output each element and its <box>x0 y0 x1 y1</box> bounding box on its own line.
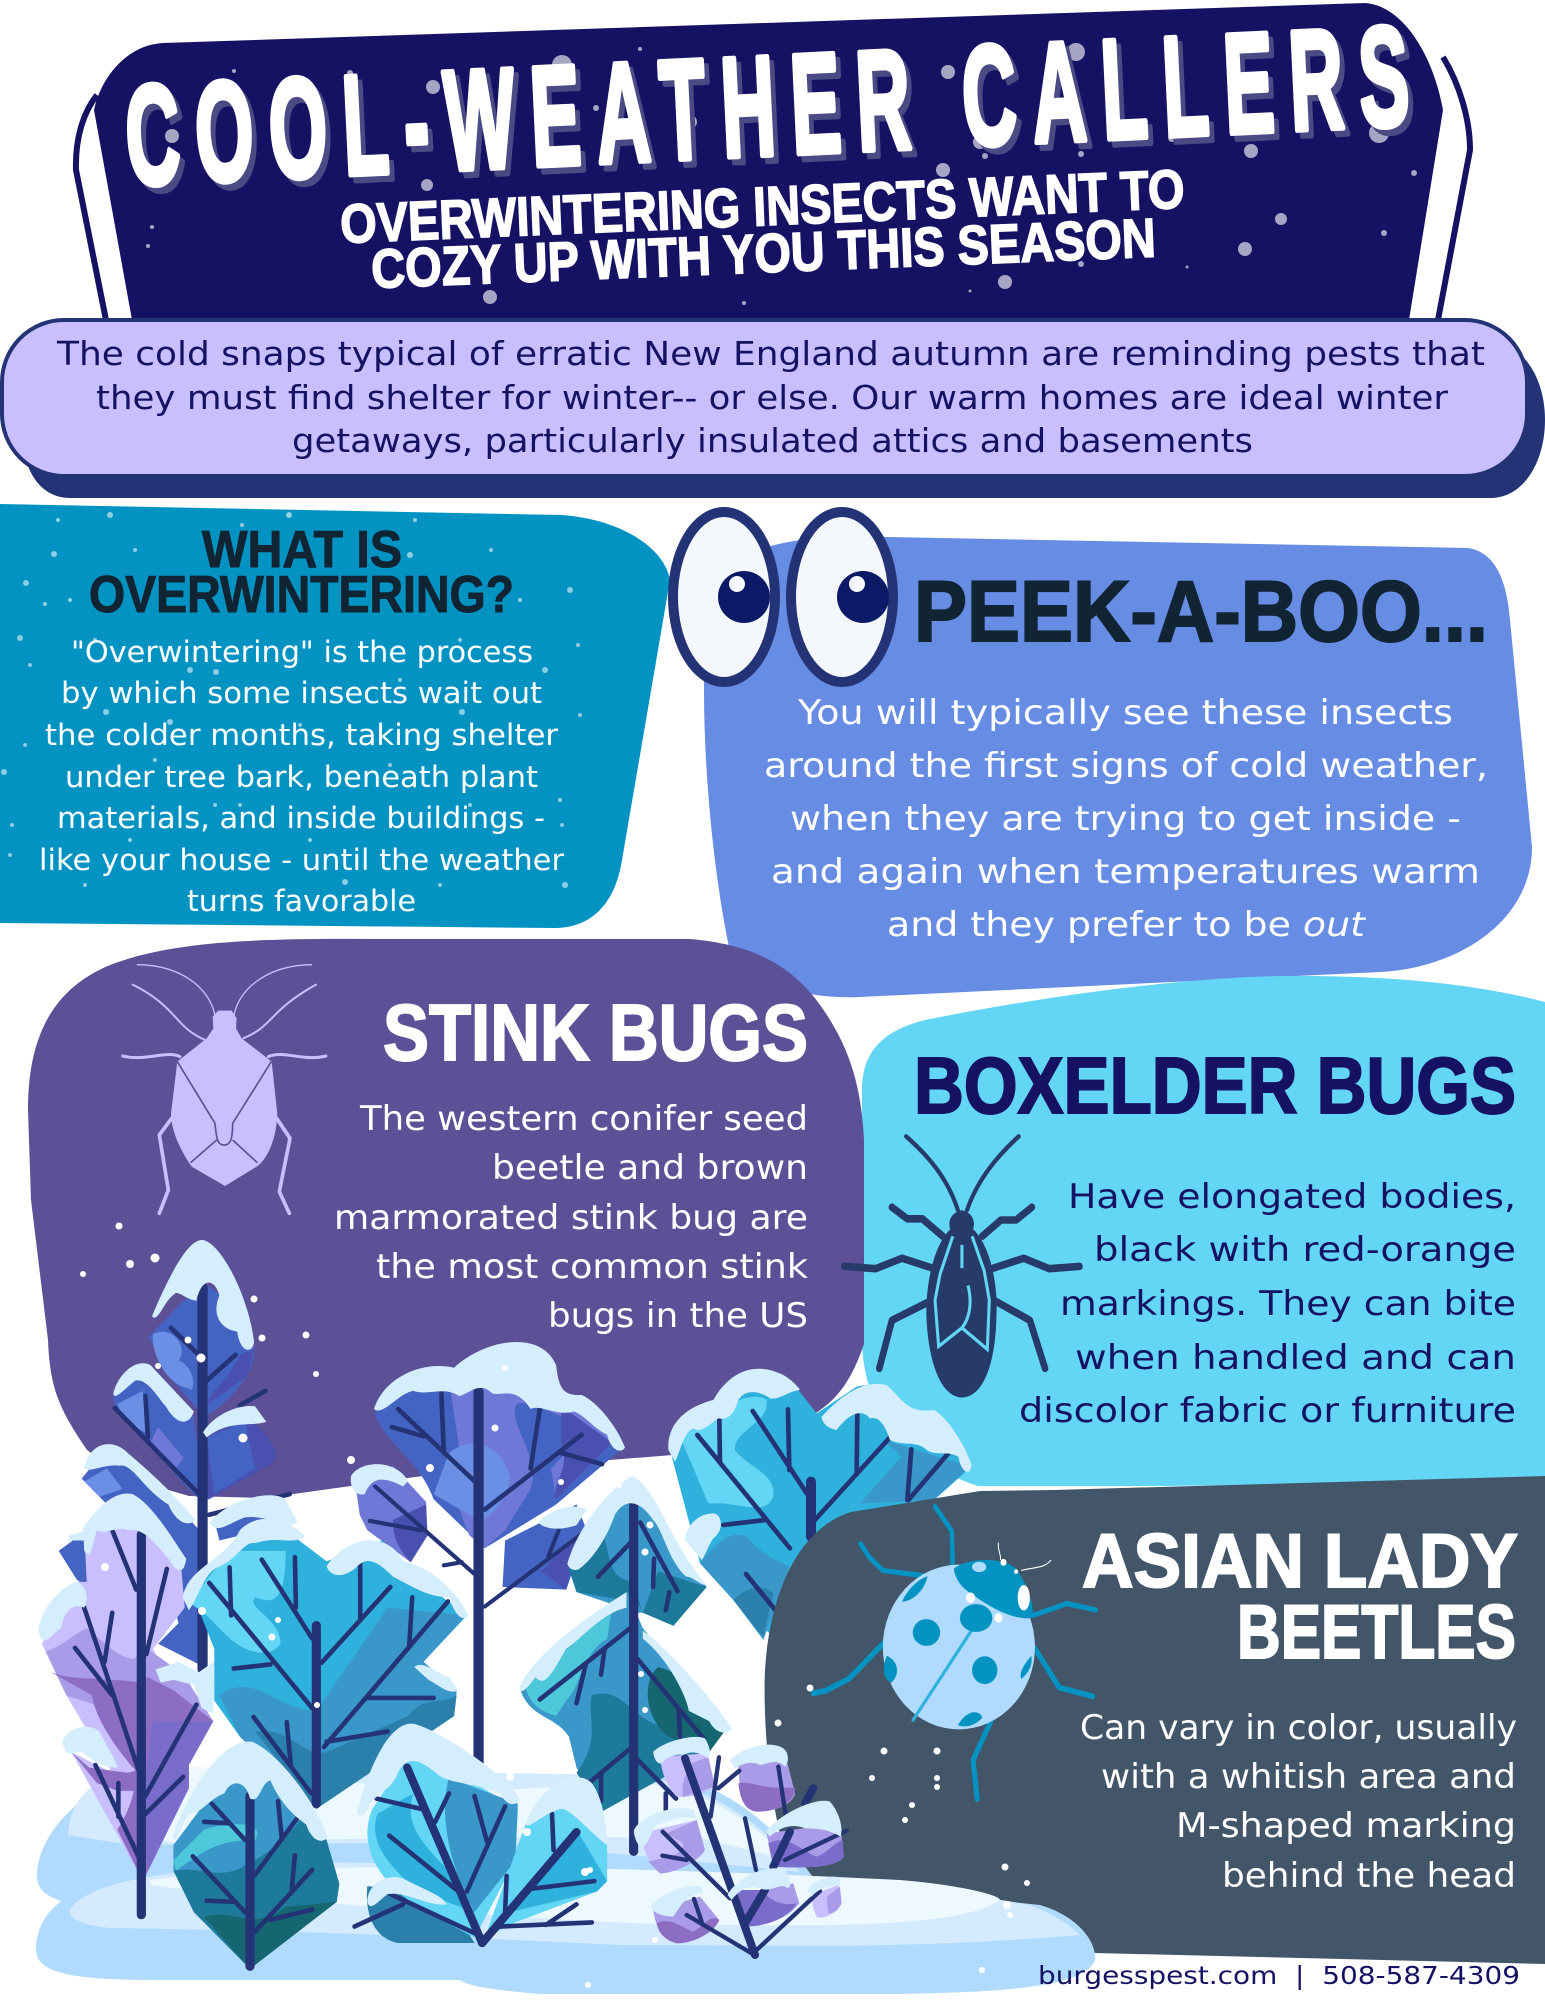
tree: center blue <box>351 1342 625 1768</box>
boxelder body text: black with red-orange <box>1094 1230 1516 1270</box>
panel: stink bugs <box>28 939 864 1498</box>
asian heading: ASIAN LADY <box>1082 1519 1518 1604</box>
icon: lady beetle <box>813 1507 1096 1799</box>
tree: small teal <box>172 1741 339 1969</box>
illustration: winter trees <box>38 1240 732 1969</box>
stink body text: marmorated stink bug are <box>334 1198 808 1238</box>
icon: stink bug <box>123 965 326 1213</box>
intro text: getaways, particularly insulated attics and basements <box>292 421 1253 460</box>
subtitle <box>339 158 1186 300</box>
asian body text: with a whitish area and <box>1101 1757 1516 1797</box>
panel heading <box>89 521 514 624</box>
peek body text: and they prefer to be out <box>887 905 1367 945</box>
bush: purple shrub <box>634 1737 847 1955</box>
panel: boxelder bugs <box>862 976 1545 1486</box>
panel snow <box>1 512 582 888</box>
tree: large cyan left <box>183 1519 468 1809</box>
panel: what is overwintering <box>0 504 670 928</box>
peek body text: when they are trying to get inside - <box>790 799 1461 839</box>
panel heading: OVERWINTERING? <box>89 566 514 624</box>
stink body text <box>334 1099 808 1336</box>
stink heading: STINK BUGS <box>383 988 808 1077</box>
peek body text <box>764 693 1488 945</box>
panel body text: turns favorable <box>187 884 416 918</box>
panel body text: materials, and inside buildings - <box>57 801 545 835</box>
asian body text: behind the head <box>1222 1856 1516 1896</box>
falling snow <box>80 1222 1030 1988</box>
tree: lavender <box>38 1493 234 1915</box>
peek body text: around the first signs of cold weather, <box>764 746 1488 786</box>
snowy ground <box>36 1767 1095 1994</box>
panel: asian lady beetles <box>765 1476 1545 1964</box>
panel body text <box>39 635 564 918</box>
asian body text <box>1080 1708 1517 1896</box>
stink body text: beetle and brown <box>492 1148 808 1188</box>
intro text: they must find shelter for winter-- or else. Our warm homes are ideal winter <box>96 378 1448 417</box>
icon: eyes <box>673 512 893 682</box>
boxelder body text: Have elongated bodies, <box>1068 1177 1516 1217</box>
panel body text: "Overwintering" is the process <box>71 635 533 669</box>
stink body text: the most common stink <box>376 1247 808 1287</box>
boxelder body text <box>1019 1177 1516 1431</box>
peek heading: PEEK-A-BOO... <box>914 564 1488 660</box>
peek body text: You will typically see these insects <box>797 693 1453 733</box>
boxelder body text: when handled and can <box>1075 1338 1516 1378</box>
panel body text: under tree bark, beneath plant <box>65 760 538 794</box>
panel body text: the colder months, taking shelter <box>45 718 558 752</box>
stink body text: The western conifer seed <box>359 1099 808 1139</box>
asian body text: Can vary in color, usually <box>1080 1708 1517 1748</box>
intro panel <box>2 320 1545 498</box>
footer contact: burgesspest.com | 508-587-4309 <box>1038 1961 1520 1990</box>
tree: large cyan right <box>668 1369 972 1640</box>
header banner <box>74 0 1470 320</box>
tree: teal tall <box>519 1476 732 1851</box>
stink body text: bugs in the US <box>548 1296 808 1336</box>
boxelder body text: markings. They can bite <box>1060 1284 1516 1324</box>
tree: tall blue left <box>59 1240 297 1670</box>
subtitle: COZY UP WITH YOU THIS SEASON <box>370 207 1157 300</box>
header snow <box>146 43 1417 305</box>
panel body text: like your house - until the weather <box>39 843 564 877</box>
panel heading: WHAT IS <box>202 521 402 579</box>
bush: cyan <box>355 1724 607 1943</box>
boxelder body text: discolor fabric or furniture <box>1019 1391 1516 1431</box>
subtitle: OVERWINTERING INSECTS WANT TO <box>339 158 1186 255</box>
icon: boxelder bug <box>844 1136 1080 1397</box>
intro text <box>56 334 1485 460</box>
asian body text: M-shaped marking <box>1176 1806 1516 1846</box>
asian heading <box>1082 1519 1518 1675</box>
intro text: The cold snaps typical of erratic New England autumn are reminding pests that <box>56 334 1485 373</box>
panel body text: by which some insects wait out <box>61 676 542 710</box>
peek body text: and again when temperatures warm <box>771 852 1480 892</box>
panel: peek-a-boo <box>704 536 1532 997</box>
